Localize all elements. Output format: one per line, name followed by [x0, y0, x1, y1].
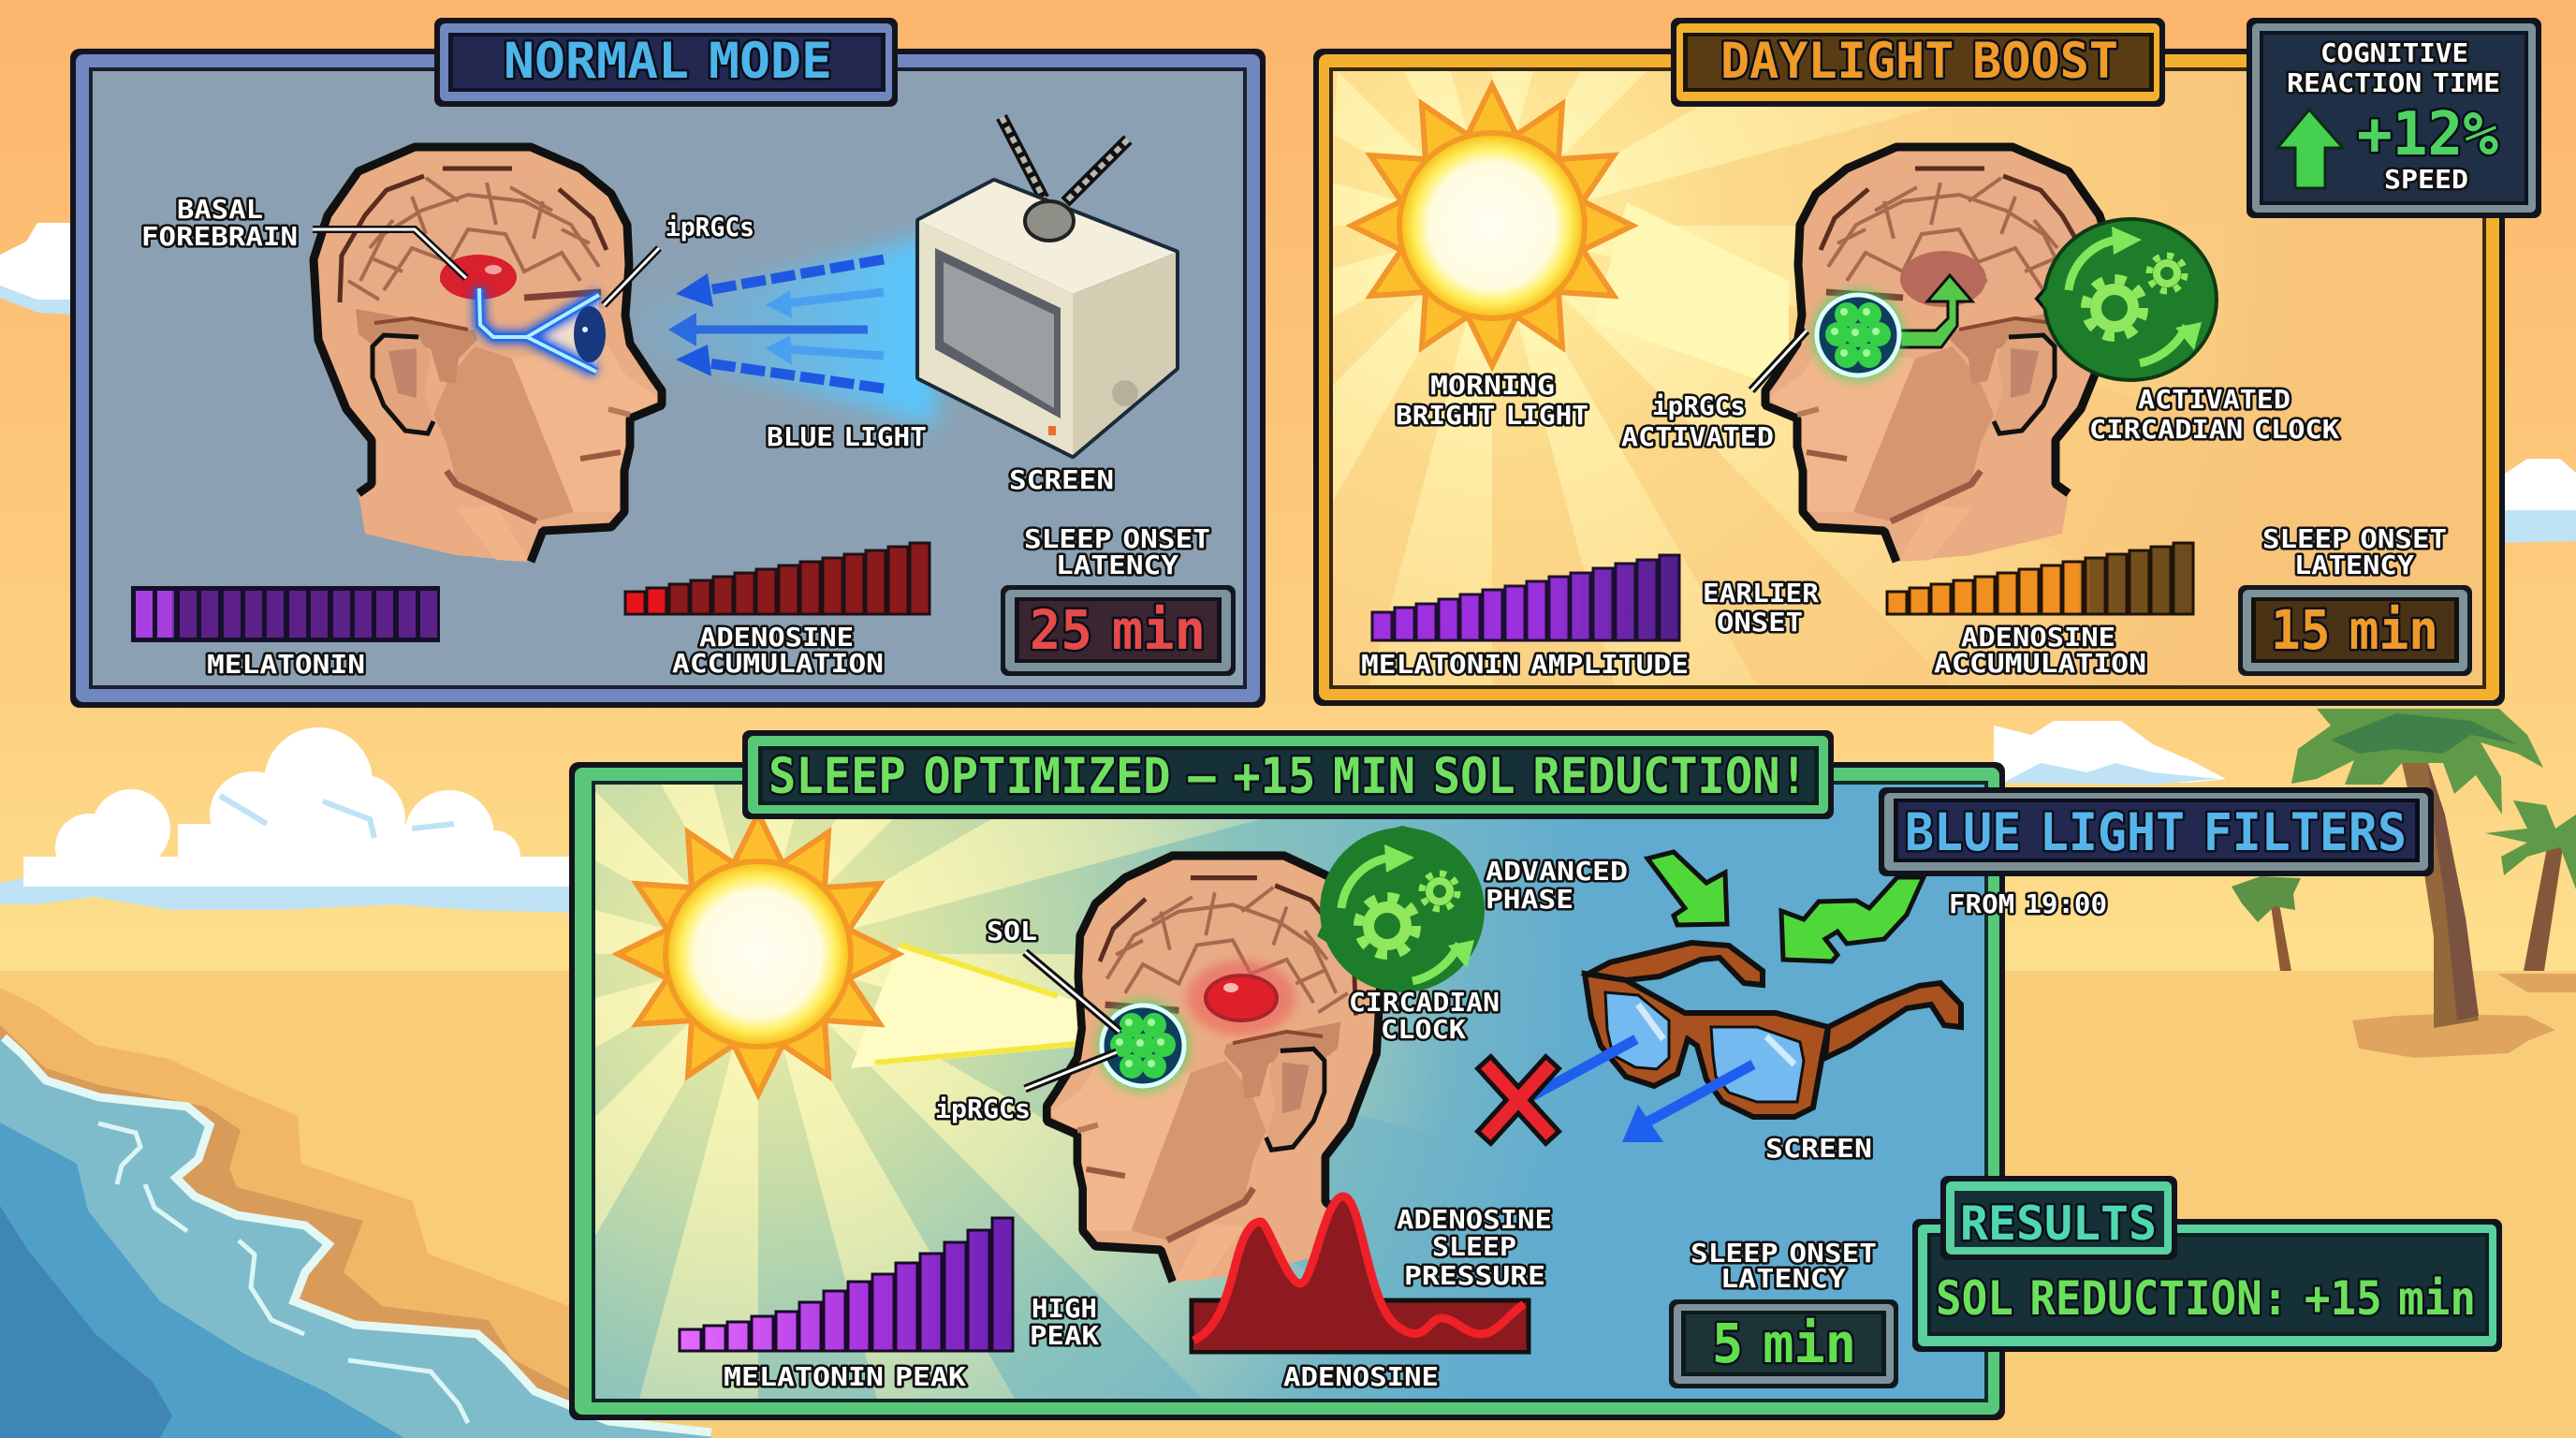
icon: activated eye — [1811, 288, 1905, 382]
blue arrow through lens — [1622, 1064, 1753, 1142]
left lens — [1605, 992, 1669, 1069]
value box: 5 min: 5 min — [1712, 1312, 1856, 1375]
label: sleep onset latency: SLEEP ONSET — [1690, 1238, 1877, 1269]
foam line — [4, 1037, 711, 1432]
label: sleep onset latency — [1690, 1238, 1877, 1294]
icon: circadian clock — [1317, 826, 1485, 992]
blue light arrows — [668, 259, 884, 389]
bars: melatonin amplitude — [1372, 555, 1679, 640]
basal forebrain red spot — [440, 255, 517, 300]
label: adenosine: ADENOSINE — [1283, 1361, 1439, 1392]
label: sleep onset latency: LATENCY — [1720, 1263, 1846, 1294]
green arrow to brain — [1900, 275, 1972, 347]
lens glare — [1638, 1005, 1794, 1064]
leader: SOL — [1025, 952, 1120, 1032]
title: daylight boost — [1671, 18, 2165, 107]
results tab: RESULTS — [1960, 1196, 2157, 1251]
leader: ipRGCs — [604, 248, 659, 305]
bars: adenosine accumulation — [625, 543, 929, 614]
value box: 25 min — [1001, 585, 1236, 676]
label: adenosine accumulation: ADENOSINE — [699, 622, 854, 653]
label: earlier onset: ONSET — [1717, 607, 1803, 638]
value box: 5 min — [1669, 1299, 1898, 1388]
bars: adenosine accumulation — [1887, 543, 2193, 614]
label: ipRGCs activated: ACTIVATED — [1621, 421, 1774, 452]
dark wet sand — [0, 1025, 655, 1438]
far right palm — [2485, 800, 2576, 971]
beam edges — [875, 945, 1076, 1063]
panel: daylight boost — [1313, 18, 2541, 706]
bars: melatonin — [131, 586, 440, 642]
label: adenosine accumulation — [672, 622, 884, 679]
label: activated circadian clock: CIRCADIAN CLOCK — [2089, 414, 2339, 445]
small palm — [2232, 876, 2301, 971]
label: high peak: HIGH — [1032, 1293, 1097, 1324]
forebrain red glow — [1187, 961, 1295, 1035]
leader: ipRGCs — [1751, 330, 1807, 390]
forebrain red spot — [1206, 976, 1277, 1020]
label: adenosine accumulation: ACCUMULATION — [1934, 648, 2146, 679]
title: normal mode: NORMAL MODE — [504, 33, 832, 90]
label: advanced phase: PHASE — [1486, 884, 1573, 915]
title: normal mode — [434, 18, 898, 107]
far temple — [1825, 983, 1961, 1058]
value box: 25 min: 25 min — [1030, 598, 1206, 662]
label: circadian clock: CLOCK — [1381, 1014, 1466, 1045]
light beam — [1594, 202, 1789, 390]
dim forebrain patch — [1900, 251, 1986, 307]
label: sleep onset latency: SLEEP ONSET — [1024, 523, 1210, 554]
callout: blue light filters — [1879, 787, 2434, 876]
green arrow down — [1647, 852, 1727, 925]
label: screen: SCREEN — [1009, 464, 1114, 495]
wave lines — [98, 1123, 468, 1423]
cloud: behind lower panel — [1994, 721, 2226, 785]
chart: adenosine — [1192, 1196, 1529, 1352]
label: ipRGCs activated: ipRGCs — [1652, 390, 1746, 421]
deepest water — [0, 1206, 172, 1438]
results text: SOL REDUCTION: +15 min — [1936, 1271, 2476, 1326]
icon: activated eye — [1096, 999, 1190, 1093]
label: circadian clock — [1349, 987, 1500, 1045]
icon: television — [919, 117, 1176, 455]
label: sleep onset latency: LATENCY — [1056, 550, 1178, 580]
label: high peak — [1030, 1293, 1099, 1351]
front frame — [1585, 974, 1828, 1117]
panel frame — [569, 762, 2005, 1420]
value box: 15 min — [2238, 585, 2472, 676]
title: sleep optimized: SLEEP OPTIMIZED – +15 MIN SOL REDUCTION! — [768, 748, 1808, 805]
label: high peak: PEAK — [1030, 1320, 1099, 1351]
icon: circadian clock — [2037, 219, 2217, 380]
label: basal forebrain — [141, 194, 298, 252]
sand — [0, 971, 2576, 1438]
label: ipRGCs activated — [1621, 390, 1774, 452]
cloud: left large — [0, 727, 580, 913]
label: advanced phase: ADVANCED — [1486, 856, 1628, 887]
panel frame — [70, 49, 1266, 708]
label: adenosine accumulation: ACCUMULATION — [672, 648, 884, 679]
label: earlier onset: EARLIER — [1703, 578, 1819, 609]
sun rays — [1333, 71, 2482, 685]
label: activated circadian clock — [2089, 384, 2339, 445]
label: earlier onset — [1703, 578, 1819, 638]
icon: red x — [1490, 1069, 1546, 1131]
cloud: right — [2499, 459, 2576, 543]
leader: basal forebrain — [313, 229, 466, 278]
label: sleep onset latency — [2262, 523, 2447, 580]
icon: sun — [618, 814, 899, 1094]
label: sleep onset latency: LATENCY — [2294, 550, 2414, 580]
panel: normal mode — [70, 18, 1266, 708]
label: sleep onset latency: SLEEP ONSET — [2262, 523, 2447, 554]
label: morning bright light — [1396, 370, 1588, 431]
right lens — [1711, 1027, 1804, 1102]
label: melatonin peak: MELATONIN PEAK — [724, 1361, 966, 1392]
label: adenosine sleep pressure: PRESSURE — [1404, 1260, 1545, 1291]
label: basal forebrain: BASAL — [177, 194, 263, 225]
callout: blue light filters: BLUE LIGHT FILTERS — [1905, 802, 2407, 862]
title: sleep optimized — [742, 730, 1834, 819]
title: daylight boost: DAYLIGHT BOOST — [1720, 33, 2118, 90]
big palm — [2291, 709, 2543, 1028]
value box: 15 min: 15 min — [2271, 598, 2438, 662]
label: morning bright light: BRIGHT LIGHT — [1396, 400, 1588, 431]
label: from 19:00: FROM 19:00 — [1949, 888, 2107, 919]
head — [314, 147, 662, 562]
label: melatonin: MELATONIN — [207, 649, 365, 680]
green arrow curved — [1781, 877, 1924, 961]
callout: cognitive reaction time: +12% — [2357, 100, 2498, 169]
label: screen: SCREEN — [1765, 1133, 1872, 1164]
label: ipRGCs: ipRGCs — [935, 1093, 1031, 1124]
panel: sleep optimized — [569, 730, 2005, 1420]
label: adenosine accumulation — [1934, 622, 2146, 679]
label: adenosine sleep pressure — [1397, 1204, 1552, 1291]
palm trees — [2232, 709, 2576, 1058]
callout: cognitive reaction time: SPEED — [2384, 164, 2468, 195]
callout: cognitive reaction time: COGNITIVE — [2320, 37, 2468, 68]
label: advanced phase — [1486, 856, 1628, 915]
label: sleep onset latency — [1024, 523, 1210, 580]
blocked blue arrow — [1516, 1039, 1636, 1105]
results tab — [1940, 1176, 2177, 1260]
leader: ipRGCs — [1025, 1052, 1117, 1089]
callout: cognitive reaction time — [2247, 18, 2541, 218]
panel frame — [1313, 49, 2505, 706]
icon: up arrow — [2277, 110, 2343, 188]
callout: cognitive reaction time: REACTION TIME — [2287, 67, 2500, 98]
icon: glasses — [1585, 943, 1961, 1117]
label: morning bright light: MORNING — [1430, 370, 1555, 401]
label: ipRGCs: ipRGCs — [666, 212, 754, 242]
results body — [1912, 1219, 2502, 1352]
bars: melatonin peak — [680, 1218, 1013, 1351]
label: melatonin amplitude: MELATONIN AMPLITUDE — [1361, 649, 1689, 680]
cloud: top left — [0, 223, 75, 315]
label: adenosine sleep pressure: ADENOSINE — [1397, 1204, 1552, 1235]
label: activated circadian clock: ACTIVATED — [2138, 384, 2291, 415]
label: adenosine sleep pressure: SLEEP — [1432, 1231, 1516, 1262]
icon: sun — [1352, 85, 1632, 366]
sun rays — [595, 785, 1984, 1399]
wet sand band — [0, 988, 599, 1438]
label: SOL: SOL — [987, 916, 1037, 946]
optic pathway neon — [479, 288, 606, 372]
label: adenosine accumulation: ADENOSINE — [1961, 622, 2115, 653]
label: basal forebrain: FOREBRAIN — [141, 221, 298, 252]
near temple — [1588, 943, 1763, 985]
sky — [0, 0, 2576, 972]
screen glow — [637, 234, 936, 426]
head — [1046, 856, 1381, 1282]
panel: results — [1912, 1176, 2502, 1352]
label: circadian clock: CIRCADIAN — [1349, 987, 1500, 1018]
head — [1765, 147, 2114, 562]
deep water — [0, 1123, 404, 1438]
light beam — [851, 945, 1087, 1068]
shallow water — [0, 1037, 711, 1438]
label: blue light: BLUE LIGHT — [767, 421, 927, 452]
